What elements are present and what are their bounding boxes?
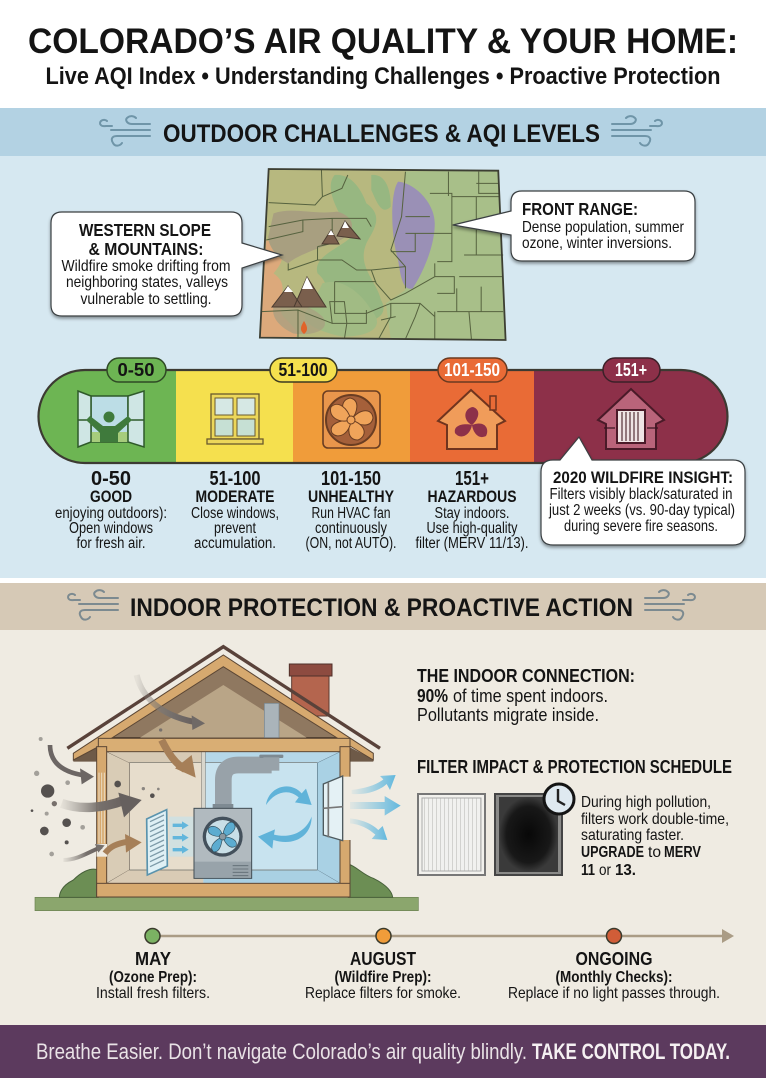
text block: filter advice: MERV xyxy=(664,844,701,861)
callout: western slope: Wildfire smoke drifting from xyxy=(62,258,230,275)
AQI column: good: Open windows xyxy=(69,520,153,537)
icon: HVAC fan xyxy=(323,391,380,448)
timeline item: Ongoing: (Monthly Checks): xyxy=(556,969,672,986)
filter comparison xyxy=(418,784,574,875)
timeline item: Ongoing: Replace if no light passes through. xyxy=(508,985,720,1002)
timeline item: May: (Ozone Prep): xyxy=(109,969,197,986)
callout: western slope: neighboring states, valleys xyxy=(66,274,228,291)
text block: indoor connection: Pollutants migrate inside. xyxy=(417,705,599,725)
callout: 2020 wildfire insight: Filters visibly black/saturated in xyxy=(550,486,732,503)
pill: 51-100 xyxy=(270,358,337,382)
panel: outdoor challenges xyxy=(0,108,766,578)
clean filter xyxy=(418,794,485,875)
AQI column: hazardous xyxy=(416,468,528,552)
callout: 2020 wildfire insight: just 2 weeks (vs. 90-day typical) xyxy=(548,502,735,519)
AQI column: unhealthy: (ON, not AUTO). xyxy=(306,535,396,552)
HVAC unit xyxy=(194,808,252,878)
AQI column: good xyxy=(55,468,167,552)
duct xyxy=(213,755,283,809)
AQI column: hazardous: Stay indoors. xyxy=(434,505,510,522)
section heading band: indoor: INDOOR PROTECTION & PROACTIVE ACTION xyxy=(130,594,633,622)
circulation arrows xyxy=(258,786,312,849)
text block: filter advice: During high pollution, xyxy=(581,794,711,811)
marker: Ongoing xyxy=(606,928,622,944)
polluted air arrows xyxy=(50,675,205,860)
AQI column: moderate: 51-100 xyxy=(210,468,260,490)
icon: closed window xyxy=(207,394,263,444)
AQI column: hazardous: HAZARDOUS xyxy=(428,488,516,506)
dirty filter xyxy=(495,794,562,875)
timeline item: August: Replace filters for smoke. xyxy=(305,985,461,1002)
text block: indoor connection: 90% xyxy=(417,686,448,706)
AQI bar xyxy=(39,358,728,463)
footer banner: Breathe Easier. Don’t navigate Colorado’s air quality blindly. xyxy=(36,1039,527,1064)
text block: indoor connection xyxy=(417,665,635,725)
pill: 51-100: 51-100 xyxy=(278,360,328,380)
AQI column: hazardous: filter (MERV 11/13). xyxy=(416,535,528,552)
icon: wind right xyxy=(645,590,695,620)
callout: front range: FRONT RANGE: xyxy=(522,199,638,219)
map of Colorado xyxy=(260,169,506,340)
right window xyxy=(323,776,343,841)
timeline item: August xyxy=(305,949,461,1002)
text block: filter advice: or xyxy=(599,862,612,879)
AQI column: hazardous: 151+ xyxy=(455,468,489,490)
callout: western slope: & MOUNTAINS: xyxy=(88,239,204,259)
callout: 2020 wildfire insight xyxy=(541,437,745,545)
icon: house with fan xyxy=(438,390,505,449)
AQI column: good: enjoying outdoors): xyxy=(55,505,167,522)
callout: front range: Dense population, summer xyxy=(522,219,685,236)
icon: wind left xyxy=(68,590,118,620)
AQI column: moderate xyxy=(191,468,279,552)
text block: filter advice: to xyxy=(648,844,661,861)
title xyxy=(28,22,738,90)
timeline item: August: AUGUST xyxy=(350,949,416,969)
filter xyxy=(147,810,167,875)
AQI column: good: 0-50 xyxy=(91,468,131,490)
soffits under eaves xyxy=(73,747,373,762)
icon: wind left xyxy=(100,116,150,146)
AQI column: hazardous: Use high-quality xyxy=(426,520,518,537)
siding lines on left wall xyxy=(99,773,104,843)
AQI column: unhealthy: 101-150 xyxy=(321,468,381,490)
AQI column: unhealthy: continuously xyxy=(315,520,387,537)
icon: wind right xyxy=(612,116,662,146)
marker: August xyxy=(376,928,391,944)
text block: indoor connection: THE INDOOR CONNECTION: xyxy=(417,665,635,686)
pill: 151+ xyxy=(603,358,660,382)
icon: clock xyxy=(544,784,574,814)
text block: filter advice xyxy=(581,794,729,879)
callout: front range xyxy=(453,191,695,261)
callout: western slope: WESTERN SLOPE xyxy=(79,220,211,240)
AQI column: moderate: MODERATE xyxy=(196,488,274,506)
section heading band: outdoor xyxy=(0,108,766,156)
panel: indoor protection xyxy=(0,583,766,1025)
AQI column: moderate: Close windows, xyxy=(191,505,279,522)
escaping clean air arrows xyxy=(350,775,401,840)
timeline item: Ongoing: ONGOING xyxy=(576,949,652,969)
text block: filter advice: 11 xyxy=(581,862,595,879)
title: COLORADO’S AIR QUALITY & YOUR HOME: xyxy=(28,22,738,61)
text block: filter advice: UPGRADE xyxy=(581,844,644,861)
pill: 101-150: 101-150 xyxy=(444,360,500,380)
section heading band: outdoor: OUTDOOR CHALLENGES & AQI LEVELS xyxy=(163,120,600,148)
icon: house with filter xyxy=(598,389,664,449)
pill: 151+: 151+ xyxy=(615,360,647,380)
icon: flame xyxy=(301,321,307,334)
callout: front range: ozone, winter inversions. xyxy=(522,235,672,252)
callout: western slope: vulnerable to settling. xyxy=(80,291,212,308)
timeline item: May: Install fresh filters. xyxy=(96,985,210,1002)
callout: 2020 wildfire insight: during severe fire seasons. xyxy=(564,518,718,535)
pill: 0-50: 0-50 xyxy=(118,360,154,380)
icon: mountains south xyxy=(272,277,326,307)
text block: filter advice: filters work double-time, xyxy=(581,811,729,828)
icon: mountains north xyxy=(322,221,360,244)
chimney xyxy=(289,664,332,716)
bushes xyxy=(59,864,393,897)
timeline item: May xyxy=(96,949,210,1002)
text block: filter advice: saturating faster. xyxy=(581,827,684,844)
header background xyxy=(0,0,766,108)
house cutaway illustration xyxy=(31,647,418,911)
marker: May xyxy=(145,928,160,944)
timeline item: August: (Wildfire Prep): xyxy=(334,969,432,986)
AQI column: moderate: accumulation. xyxy=(194,535,276,552)
pill: 0-50 xyxy=(107,358,166,382)
callout: 2020 wildfire insight: 2020 WILDFIRE INSIGHT: xyxy=(553,469,733,487)
AQI column: good: GOOD xyxy=(90,488,132,506)
icon: open window with person xyxy=(78,391,144,447)
timeline item: Ongoing xyxy=(508,949,720,1002)
timeline item: May: MAY xyxy=(135,949,171,969)
footer banner xyxy=(0,1025,766,1078)
callout: western slope xyxy=(51,212,282,316)
attic and roof xyxy=(67,647,380,760)
text block: indoor connection: of time spent indoors. xyxy=(453,686,608,706)
ground xyxy=(35,897,418,911)
AQI column: moderate: prevent xyxy=(214,520,257,537)
AQI column: good: for fresh air. xyxy=(76,535,146,552)
clean air arrows from filter xyxy=(169,817,193,857)
arrow tip xyxy=(722,929,734,943)
AQI column: unhealthy xyxy=(306,468,396,552)
AQI column: unhealthy: Run HVAC fan xyxy=(312,505,390,522)
wood walls and floor xyxy=(97,747,350,897)
interior walls xyxy=(107,752,340,883)
text block: filter advice: 13. xyxy=(615,862,636,879)
AQI column: unhealthy: UNHEALTHY xyxy=(308,488,394,506)
gap in right wall xyxy=(341,777,351,840)
section heading band: indoor xyxy=(0,583,766,630)
pollutant particles xyxy=(31,728,162,856)
timeline xyxy=(145,928,734,944)
gap in left wall xyxy=(97,844,107,857)
